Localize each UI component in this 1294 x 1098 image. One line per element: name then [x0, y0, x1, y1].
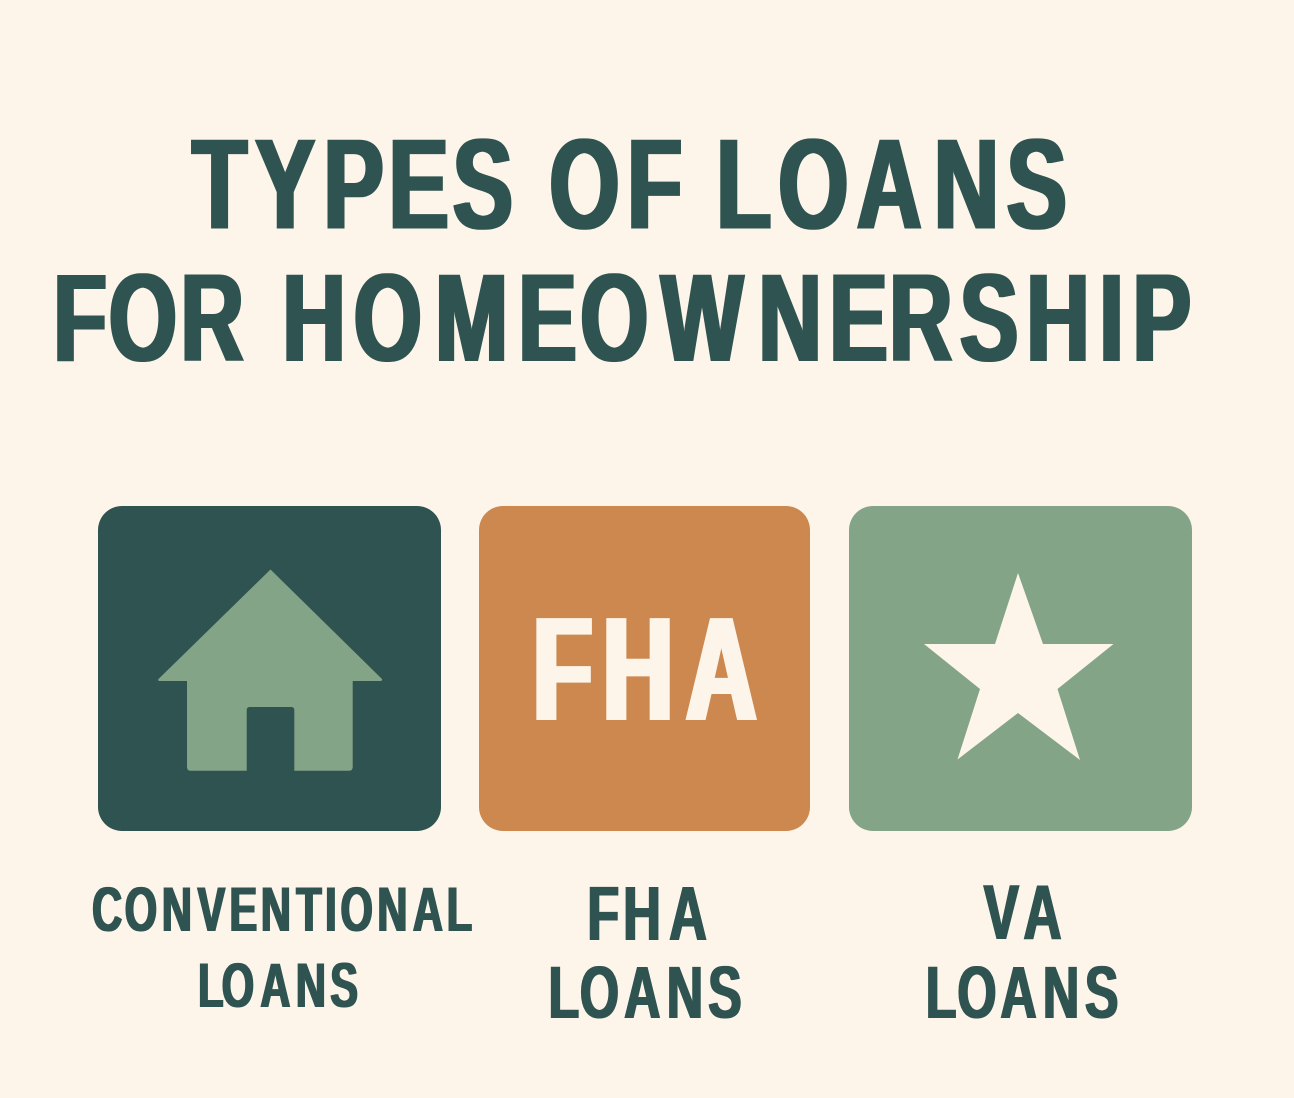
label: VA loans: VA: [984, 870, 1062, 957]
icon: house: [158, 570, 382, 771]
icon: FHA lettering: FHA: [533, 585, 757, 752]
label: conventional loans: [92, 876, 472, 1021]
label: FHA loans: LOANS: [549, 953, 742, 1034]
title: TYPES OF LOANS: [192, 111, 1067, 256]
panel: FHA loans card: [479, 506, 810, 831]
icon: star: [924, 573, 1114, 760]
label: VA loans: [926, 870, 1119, 1034]
label: conventional loans: CONVENTIONAL: [92, 876, 472, 945]
panel: VA loans card: [849, 506, 1192, 831]
label: conventional loans: LOANS: [198, 952, 358, 1021]
label: VA loans: LOANS: [926, 953, 1119, 1034]
panel: conventional loans card: [98, 506, 441, 831]
label: FHA loans: [549, 870, 742, 1034]
title: [53, 111, 1191, 388]
label: FHA loans: FHA: [587, 870, 707, 956]
title: FOR HOMEOWNERSHIP: [53, 247, 1191, 388]
